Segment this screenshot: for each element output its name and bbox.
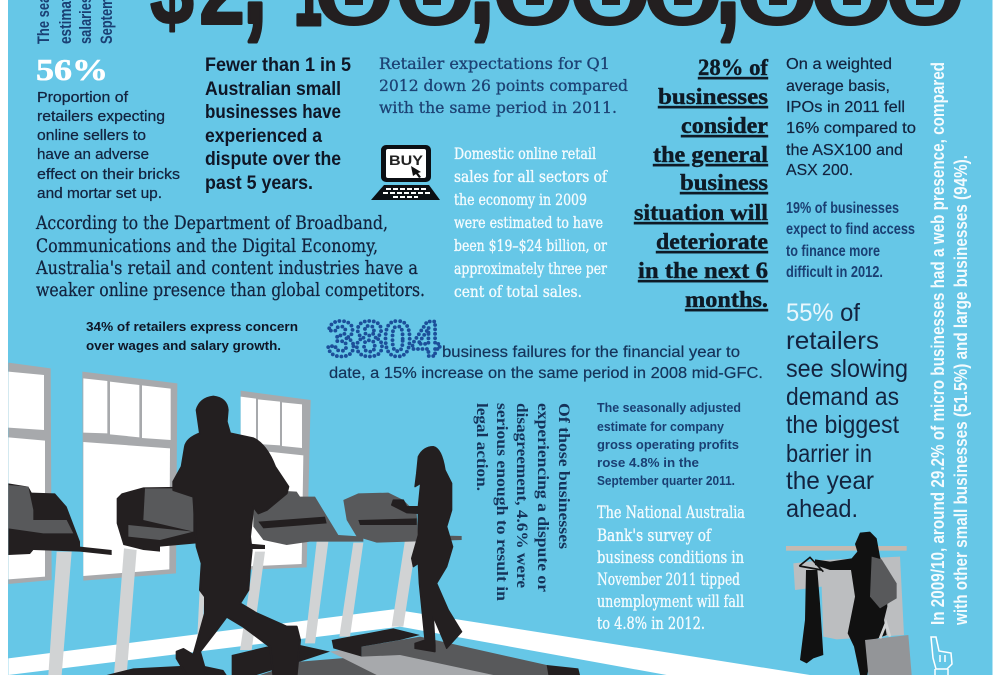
text: IPOs: ASX 200. (786, 162, 853, 179)
text: department of broadband: According to the Department of Broadband, (35, 213, 388, 234)
text: 55 percent slowing demand (786, 299, 908, 523)
text: access to finance: to finance more (786, 243, 880, 260)
text: access to finance: expect to find access (786, 221, 915, 238)
text: disputes: past 5 years. (205, 173, 313, 194)
stat: 56 percent: and mortar set up. (37, 186, 162, 202)
text: wages concern: 34% of retailers express concern (86, 320, 298, 334)
text: gross operating profits: estimate for company (597, 419, 725, 434)
text: 28 percent deteriorate: months. (685, 287, 768, 312)
text: IPOs (786, 56, 916, 179)
text: access to finance: difficult in 2012. (786, 264, 883, 281)
text: National Australia Bank survey: Bank's survey of (597, 526, 712, 546)
text: 55 percent slowing demand: ahead. (786, 495, 858, 523)
gym scene illustration (8, 363, 810, 675)
treadmill console 3 (247, 490, 363, 549)
stat: 56 percent: retailers expecting (37, 109, 165, 125)
stat: 3804 business failures (327, 311, 763, 382)
floor stripe (8, 609, 810, 675)
text: domestic online retail: approximately three per (454, 259, 607, 278)
text: department of broadband (35, 213, 425, 301)
text: gross operating profits: September quarter 2011. (597, 473, 735, 488)
text: gross operating profits: gross operating profits (597, 437, 739, 452)
stat: 56 percent: Proportion of (37, 90, 129, 106)
text: wages concern (86, 320, 298, 353)
text: disputes: businesses have (205, 102, 341, 123)
text: National Australia Bank survey: unemployment will fall (597, 592, 744, 612)
text: IPOs: On a weighted (786, 56, 892, 73)
text: department of broadband: Australia's retail and content industries have a (35, 258, 418, 279)
text: 28 percent deteriorate: situation will (634, 200, 768, 225)
text: 55 percent slowing demand: retailers (786, 327, 879, 355)
text: disputes: Fewer than 1 in 5 (205, 55, 351, 76)
text: access to finance: 19% of businesses (786, 200, 899, 217)
stat: 3804 business failures: business failures for the financial year to (442, 344, 740, 361)
text: 28 percent deteriorate: business (680, 170, 768, 195)
text: IPOs: 16% compared to (786, 120, 916, 137)
text: domestic online retail: sales for all sectors of (454, 167, 608, 186)
text: 28 percent deteriorate: in the next 6 (638, 258, 768, 283)
stat: 56 percent: online sellers to (37, 128, 146, 144)
text: 55 percent slowing demand: the biggest (786, 411, 899, 439)
text: retailer expectations: 2012 down 26 points compared (379, 76, 628, 95)
text: domestic online retail: were estimated to have (454, 213, 603, 232)
windows (8, 363, 311, 584)
stat: 3804 business failures: 3804 (327, 311, 440, 367)
text: gross operating profits (597, 400, 741, 488)
text: department of broadband: weaker online presence than global competitors. (36, 280, 425, 301)
treadmill console 2 (117, 487, 197, 552)
text: web presence rotated: with other small businesses (51.5%) and large businesses (94%). (951, 155, 971, 626)
text: wages rotated note (34, 0, 116, 44)
text: domestic online retail: the economy in 2009 (454, 190, 587, 209)
text: 55 percent slowing demand: the year (786, 467, 874, 495)
text: wages concern: over wages and salary growth. (86, 339, 281, 353)
text: 28 percent deteriorate: the general (653, 142, 768, 167)
stat: 56 percent: effect on their bricks (37, 167, 180, 183)
treadmill belts (260, 637, 580, 675)
text: disputes: Australian small (205, 79, 341, 100)
icon: pointing hand (931, 637, 952, 675)
main headline figure (150, 0, 966, 49)
text: retailer expectations: with the same period in 2011. (379, 98, 617, 117)
text: 55 percent slowing demand: 55% of (786, 299, 860, 327)
text: domestic online retail: Domestic online retail (454, 144, 596, 163)
text: 55 percent slowing demand: demand as (786, 383, 899, 411)
text: domestic online retail: been $19–$24 billion, or (454, 236, 607, 255)
text: 28 percent deteriorate: deteriorate (656, 229, 768, 254)
text: legal action rotated: disagreement, 4.6% were (513, 403, 530, 588)
text: IPOs: the ASX100 and (786, 142, 903, 159)
text: gross operating profits: rose 4.8% in the (597, 455, 699, 470)
text: access to finance (786, 200, 915, 281)
text: gross operating profits: The seasonally adjusted (597, 400, 741, 415)
text: disputes: dispute over the (205, 149, 341, 170)
text: domestic online retail (454, 144, 608, 301)
text: retailer expectations: Retailer expectations for Q1 (379, 54, 610, 73)
treadmill console 1 (8, 483, 112, 555)
shopper illustration (786, 532, 912, 675)
text: legal action rotated: experiencing a dispute or (534, 403, 551, 592)
text: 55 percent slowing demand: barrier in (786, 440, 872, 468)
icon: laptop with BUY (371, 145, 440, 200)
text: 28 percent deteriorate: consider (681, 113, 768, 138)
text: web presence rotated (928, 62, 971, 626)
stat: 56 percent (36, 52, 180, 202)
silhouette: running man (173, 397, 300, 675)
treadmill posts (48, 540, 417, 675)
text: disputes (205, 55, 351, 194)
text: domestic online retail: cent of total sales. (454, 282, 582, 301)
text: 28 percent deteriorate: 28% of (698, 55, 768, 80)
silhouette: woman on treadmill (392, 447, 462, 652)
stat: 56 percent: have an adverse (37, 147, 149, 163)
text: 55 percent slowing demand: see slowing (786, 355, 908, 383)
text: National Australia Bank survey: November 2011 tipped (597, 570, 740, 590)
text: National Australia Bank survey: business conditions in (597, 548, 744, 568)
text: 28 percent deteriorate: businesses (658, 84, 768, 109)
text: disputes: experienced a (205, 126, 322, 147)
text: legal action rotated: legal action. (473, 403, 490, 491)
text: legal action rotated: serious enough to result in (493, 403, 510, 601)
text: legal action rotated (473, 403, 572, 601)
stat: 3804 business failures: date, a 15% increase on the same period in 2008 mid-GFC. (329, 365, 763, 382)
icon: laptop with BUY: BUY (389, 152, 424, 168)
text: National Australia Bank survey: to 4.8% in 2012. (597, 614, 705, 634)
text: 28 percent deteriorate (634, 55, 768, 312)
treadmill bases (107, 628, 420, 675)
text: IPOs: average basis, (786, 78, 890, 95)
text: retailer expectations (379, 54, 628, 117)
text: legal action rotated: Of those businesses (555, 403, 572, 549)
text: National Australia Bank survey (597, 503, 745, 634)
treadmill console 4 (343, 493, 462, 543)
text: National Australia Bank survey: The National Australia (597, 503, 745, 523)
stat: 56 percent: 56% (36, 52, 108, 87)
text: department of broadband: Communications and the Digital Economy, (36, 236, 378, 257)
text: IPOs: IPOs in 2011 fell (786, 99, 905, 116)
